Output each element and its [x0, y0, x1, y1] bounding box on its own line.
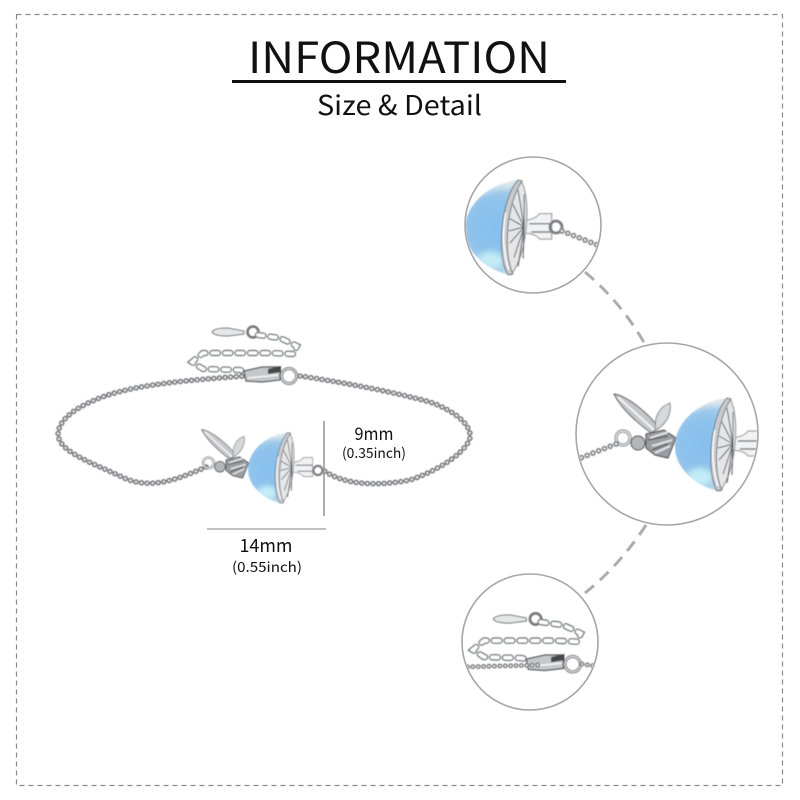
height dimension line [323, 421, 325, 516]
width label [232, 532, 302, 577]
height label: (0.35inch) [342, 443, 406, 463]
title: INFORMATION [248, 24, 550, 86]
detail circle: fairy and moonstone [576, 343, 760, 525]
main bracelet illustration [58, 326, 470, 503]
subtitle: Size & Detail [317, 84, 482, 123]
width label: 14mm [240, 532, 292, 558]
dashed connector: middle to bottom circle [585, 525, 646, 593]
detail circle: moonstone back [465, 157, 601, 293]
width label: (0.55inch) [232, 557, 302, 577]
extender chain and clasp [192, 326, 297, 384]
height label: 9mm [354, 421, 394, 446]
pendant [202, 429, 322, 503]
title underline [232, 80, 566, 83]
detail circle: extender chain [462, 574, 600, 710]
dashed connector: top to middle circle [585, 272, 646, 346]
bracelet chain [58, 376, 470, 484]
height label [342, 421, 406, 463]
width dimension line [207, 528, 326, 530]
